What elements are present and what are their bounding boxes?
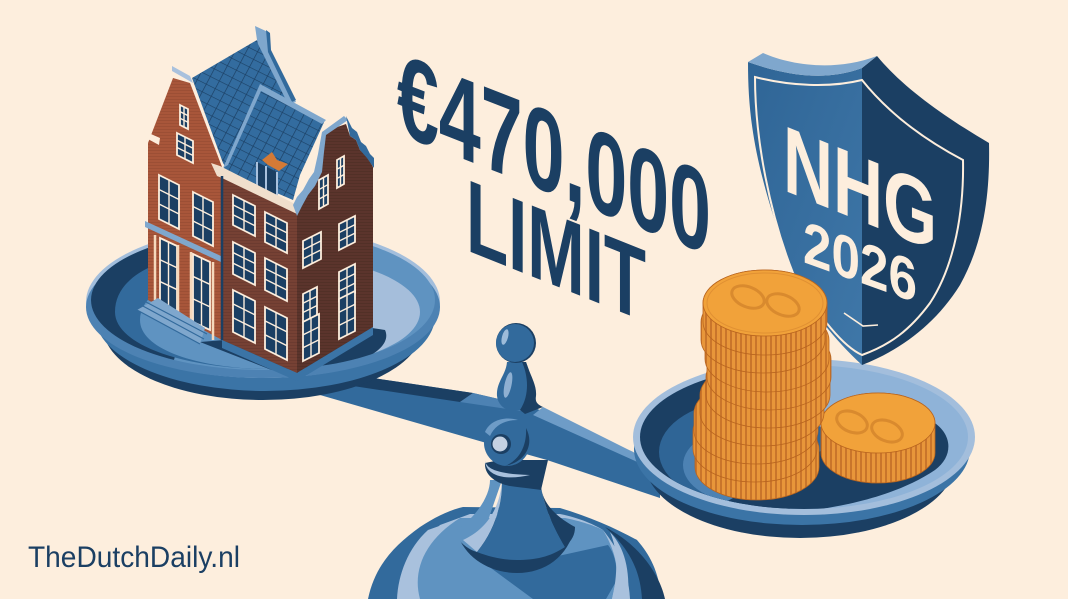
shield text 2026: 2026	[803, 209, 917, 317]
house right stepped gable facade	[222, 116, 374, 381]
shield inner outline	[755, 77, 963, 355]
watermark TheDutchDaily.nl: TheDutchDaily.nl	[28, 541, 240, 574]
scale beam	[320, 378, 660, 498]
shield tick mark	[844, 313, 878, 326]
coin stacks	[693, 270, 935, 500]
shield left blue face	[748, 62, 862, 365]
shield text NHG: NHG	[783, 105, 937, 272]
house centre dark facade	[211, 163, 297, 373]
right scale pan	[630, 359, 975, 538]
scale pivot	[484, 418, 530, 466]
single side coin	[821, 393, 935, 483]
headline word LIMIT: LIMIT	[466, 157, 646, 344]
left scale pan	[86, 242, 440, 400]
limit headline	[397, 27, 711, 344]
right facade windows	[303, 156, 355, 361]
balance scale stand	[320, 323, 665, 599]
shield top highlight	[748, 53, 877, 76]
NHG 2026 shield	[862, 56, 989, 365]
tall coin stack	[693, 270, 831, 500]
house dormer with orange finial	[257, 152, 288, 197]
headline amount: €470,000	[397, 27, 711, 281]
centre facade windows	[233, 195, 287, 360]
scale pillar	[457, 458, 575, 573]
scale base dome	[368, 507, 665, 599]
house front roof	[223, 84, 326, 200]
left facade windows	[159, 105, 213, 330]
scale knob	[496, 323, 543, 414]
shield right dark face	[862, 56, 989, 365]
house	[137, 26, 374, 381]
house back roof	[192, 26, 300, 190]
house left brick facade	[137, 66, 222, 344]
